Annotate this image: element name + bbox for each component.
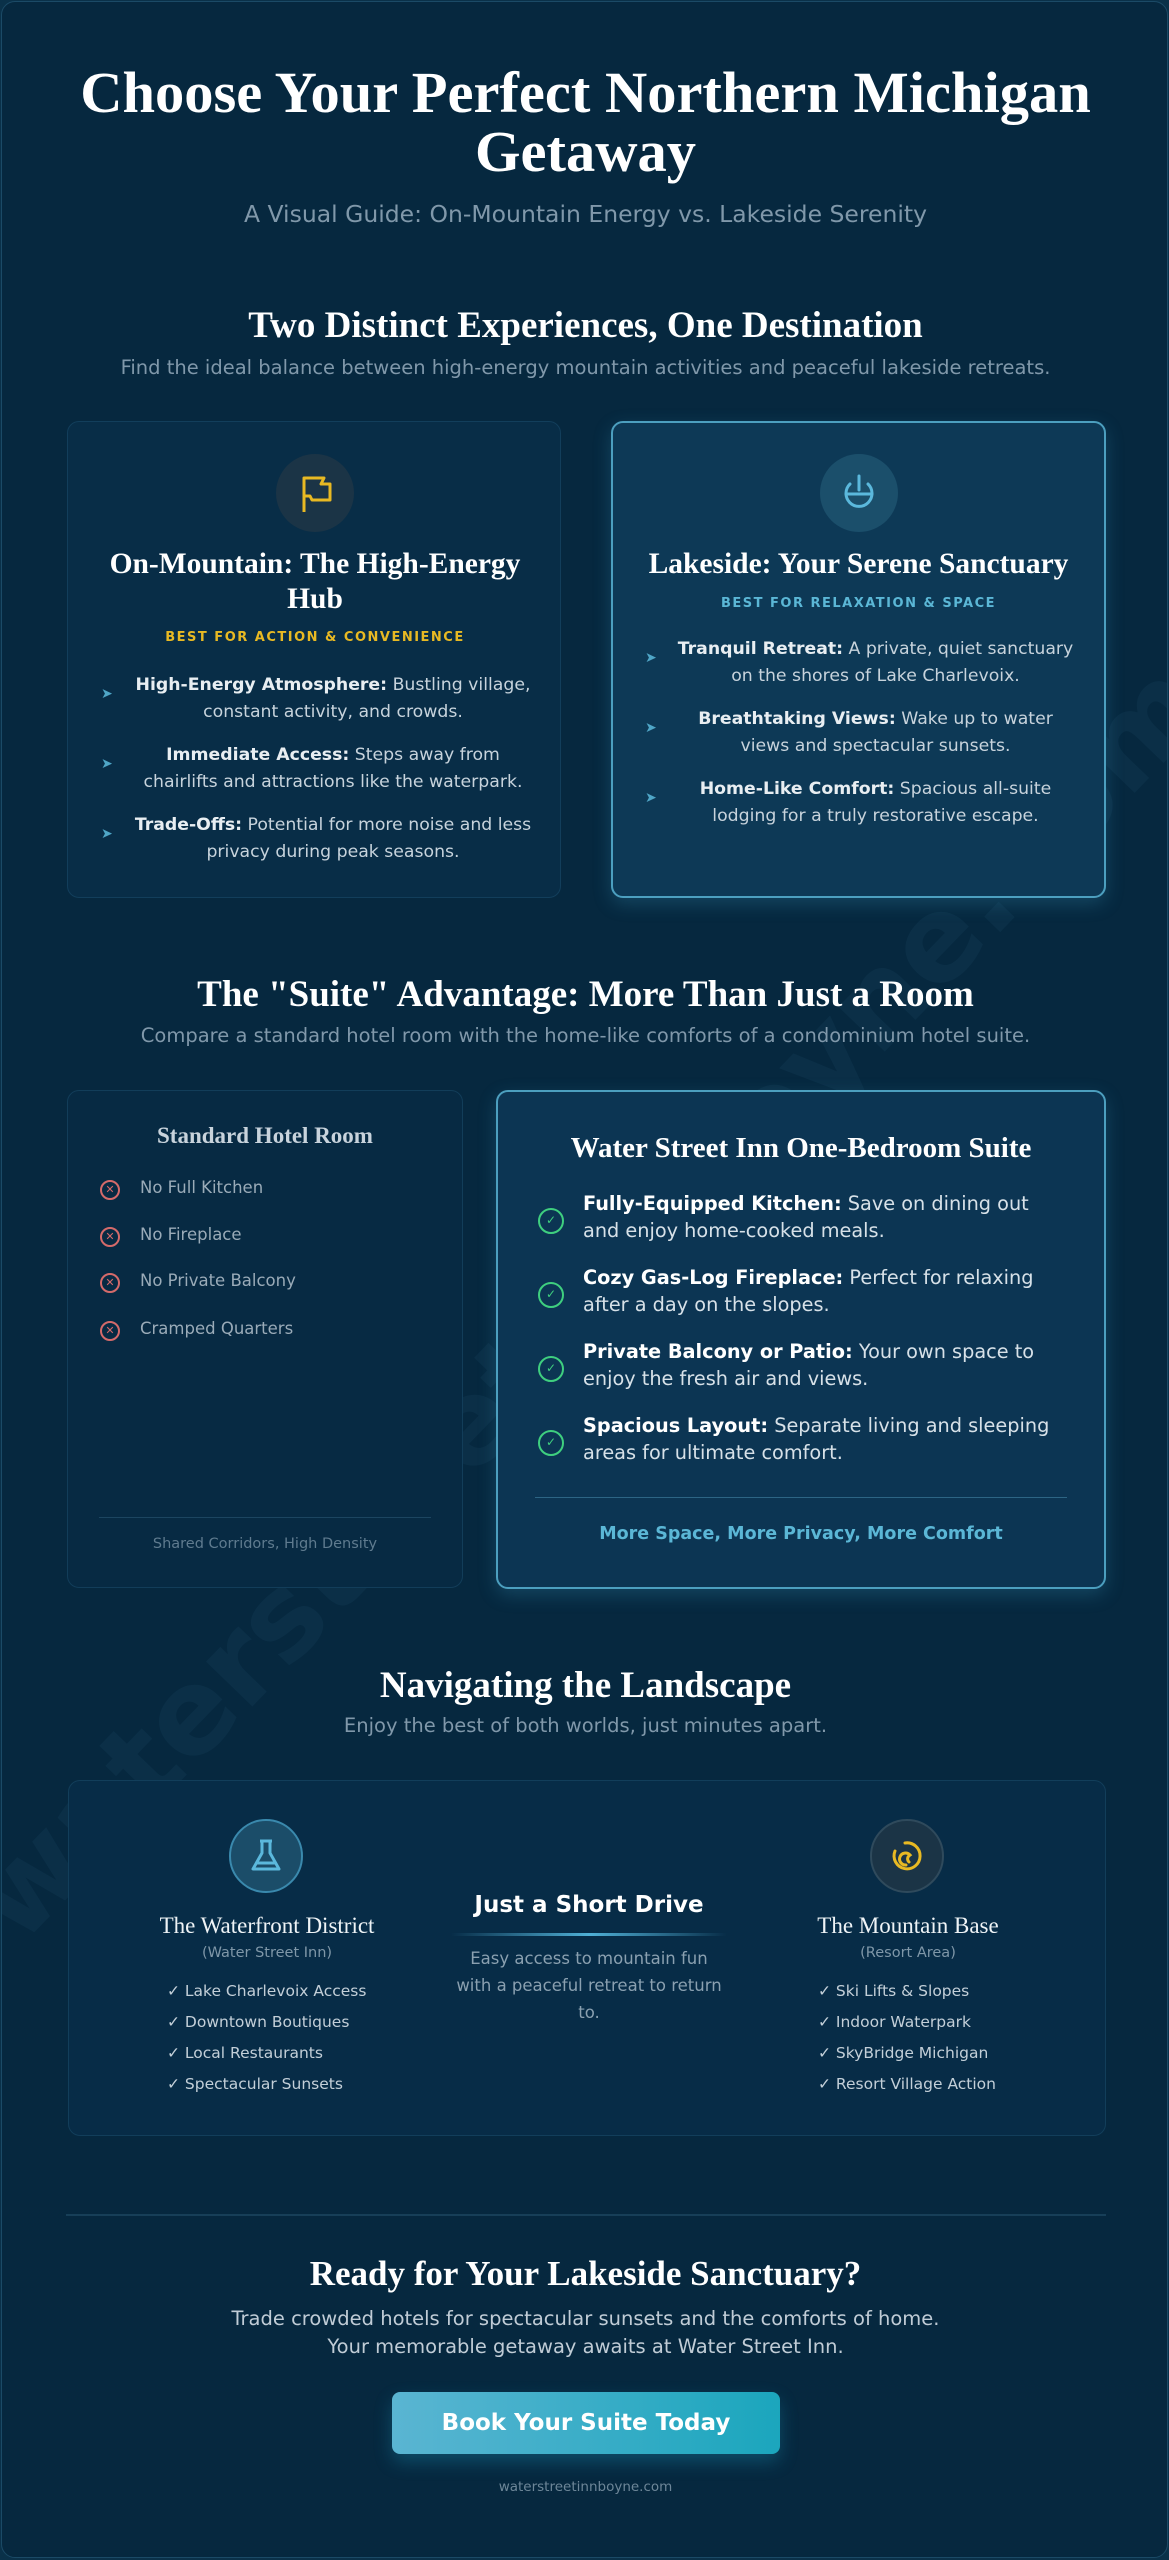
negatives list: ✕ [105,1276,115,1289]
middle: short drive: Just a Short Drive [474,1892,704,1918]
benefits list: ✓ [546,1213,556,1227]
bullets: Tranquil Retreat: A private, quiet sanctuary [678,639,1073,659]
benefits list: and enjoy home-cooked meals. [583,1219,885,1242]
footer url: waterstreetinnboyne.com [499,2479,672,2495]
panel title: Standard Hotel Room [157,1123,373,1148]
list: ✓ Local Restaurants [167,2044,323,2062]
benefits list: ✓ [546,1361,556,1375]
tagline: More Space, More Privacy, More Comfort [599,1524,1003,1544]
benefits list: Fully-Equipped Kitchen: Save on dining out [583,1192,1029,1215]
panel: on-mountain [67,421,561,898]
bullets: High-Energy Atmosphere: Bustling village, [135,675,530,695]
bullets [645,639,1073,826]
middle: short drive: to. [578,2003,600,2022]
benefits list: Private Balcony or Patio: Your own space to [583,1340,1034,1363]
column: waterfront [160,1819,374,2093]
list: ✓ SkyBridge Michigan [818,2044,988,2062]
middle: short drive: with a peaceful retreat to return [456,1976,722,1995]
cta heading: Ready for Your Lakeside Sanctuary? [310,2254,861,2293]
bullets: Immediate Access: Steps away from [166,745,500,765]
bullets: Home-Like Comfort: Spacious all-suite [700,779,1051,799]
title: The Waterfront District [160,1913,374,1938]
cta text [231,2307,940,2358]
negatives list: No Full Kitchen [140,1178,263,1197]
title: Choose Your Perfect Northern Michigan [80,60,1091,125]
panel: water street inn suite [496,1090,1106,1589]
negatives list: No Private Balcony [140,1271,296,1290]
benefits list: after a day on the slopes. [583,1293,830,1316]
negatives list: No Fireplace [140,1225,242,1244]
benefits list: enjoy the fresh air and views. [583,1367,868,1390]
bullets: ➤ [101,826,113,842]
benefits list [538,1192,1049,1464]
cta text: Trade crowded hotels for spectacular sunsets and the comforts of home. [231,2307,940,2330]
tag: BEST FOR ACTION & CONVENIENCE [165,630,465,645]
bullets: chairlifts and attractions like the waterpark. [144,772,522,792]
benefits list: ✓ [546,1287,556,1301]
panel title: Water Street Inn One-Bedroom Suite [571,1132,1031,1164]
bullets: Breathtaking Views: Wake up to water [698,709,1053,729]
cta text: Your memorable getaway awaits at Water Street Inn. [327,2335,844,2358]
panel: landscape map [68,1780,1106,2136]
bullets: ➤ [645,650,657,666]
icon: flask [229,1819,303,1893]
negatives list: ✕ [105,1230,115,1243]
bullets: lodging for a truly restorative escape. [712,806,1039,826]
benefits list: ✓ [546,1435,556,1449]
subheading: two experiences: Find the ideal balance between high-energy mountain activities and peaceful lakeside retreats. [121,356,1050,379]
benefits list: Cozy Gas-Log Fireplace: Perfect for relaxing [583,1266,1034,1289]
list [167,1982,366,2093]
button: Book Your Suite Today [442,2410,730,2436]
icon: swirl [870,1819,944,1893]
bullets: constant activity, and crowds. [203,702,463,722]
subheading: landscape: Enjoy the best of both worlds, just minutes apart. [344,1714,827,1737]
title [80,60,1091,184]
card title: Lakeside: Your Serene Sanctuary [649,548,1068,580]
list: ✓ Lake Charlevoix Access [167,1982,366,2000]
bullets: on the shores of Lake Charlevoix. [731,666,1020,686]
middle: short drive [456,1892,722,2022]
footer note: Shared Corridors, High Density [153,1536,377,1552]
column: waterfront: (Water Street Inn) [202,1945,332,1961]
bullets: ➤ [645,790,657,806]
icon: flag [276,454,354,532]
middle: short drive: Easy access to mountain fun [470,1949,708,1968]
panel: standard hotel room [67,1090,463,1588]
panel: lakeside [611,421,1106,898]
column: mountain base [817,1819,999,2093]
negatives list [100,1178,296,1341]
negatives list: ✕ [105,1183,115,1196]
benefits list: areas for ultimate comfort. [583,1441,843,1464]
title: Getaway [475,119,696,184]
benefits list: Spacious Layout: Separate living and sleeping [583,1414,1049,1437]
bullets: ➤ [101,686,113,702]
subheading: suite advantage: Compare a standard hotel room with the home-like comforts of a condominium hotel suite. [141,1024,1030,1047]
bullets: views and spectacular sunsets. [740,736,1011,756]
list: ✓ Spectacular Sunsets [167,2075,343,2093]
list: ✓ Indoor Waterpark [818,2013,971,2031]
card title: Hub [287,583,343,615]
heading: landscape: Navigating the Landscape [380,1665,791,1706]
list: ✓ Resort Village Action [818,2075,996,2093]
card title: On-Mountain: The High-Energy [110,548,520,580]
heading: suite advantage: The "Suite" Advantage: More Than Just a Room [197,974,974,1015]
bullets: ➤ [101,756,113,772]
title: The Mountain Base [817,1913,999,1938]
tag: BEST FOR RELAXATION & SPACE [721,596,996,611]
negatives list: Cramped Quarters [140,1319,293,1338]
column: mountain base: (Resort Area) [860,1945,956,1961]
list: ✓ Downtown Boutiques [167,2013,349,2031]
list [818,1982,996,2093]
icon: power/bowl [820,454,898,532]
bullets: ➤ [645,720,657,736]
card title [110,548,520,615]
bullets: privacy during peak seasons. [206,842,460,862]
subtitle: A Visual Guide: On-Mountain Energy vs. Lakeside Serenity [244,200,927,228]
list: ✓ Ski Lifts & Slopes [818,1982,969,2000]
bullets [101,675,531,862]
heading: two experiences: Two Distinct Experiences, One Destination [248,305,923,346]
button [392,2392,780,2454]
negatives list: ✕ [105,1324,115,1337]
bullets: Trade-Offs: Potential for more noise and less [135,815,531,835]
